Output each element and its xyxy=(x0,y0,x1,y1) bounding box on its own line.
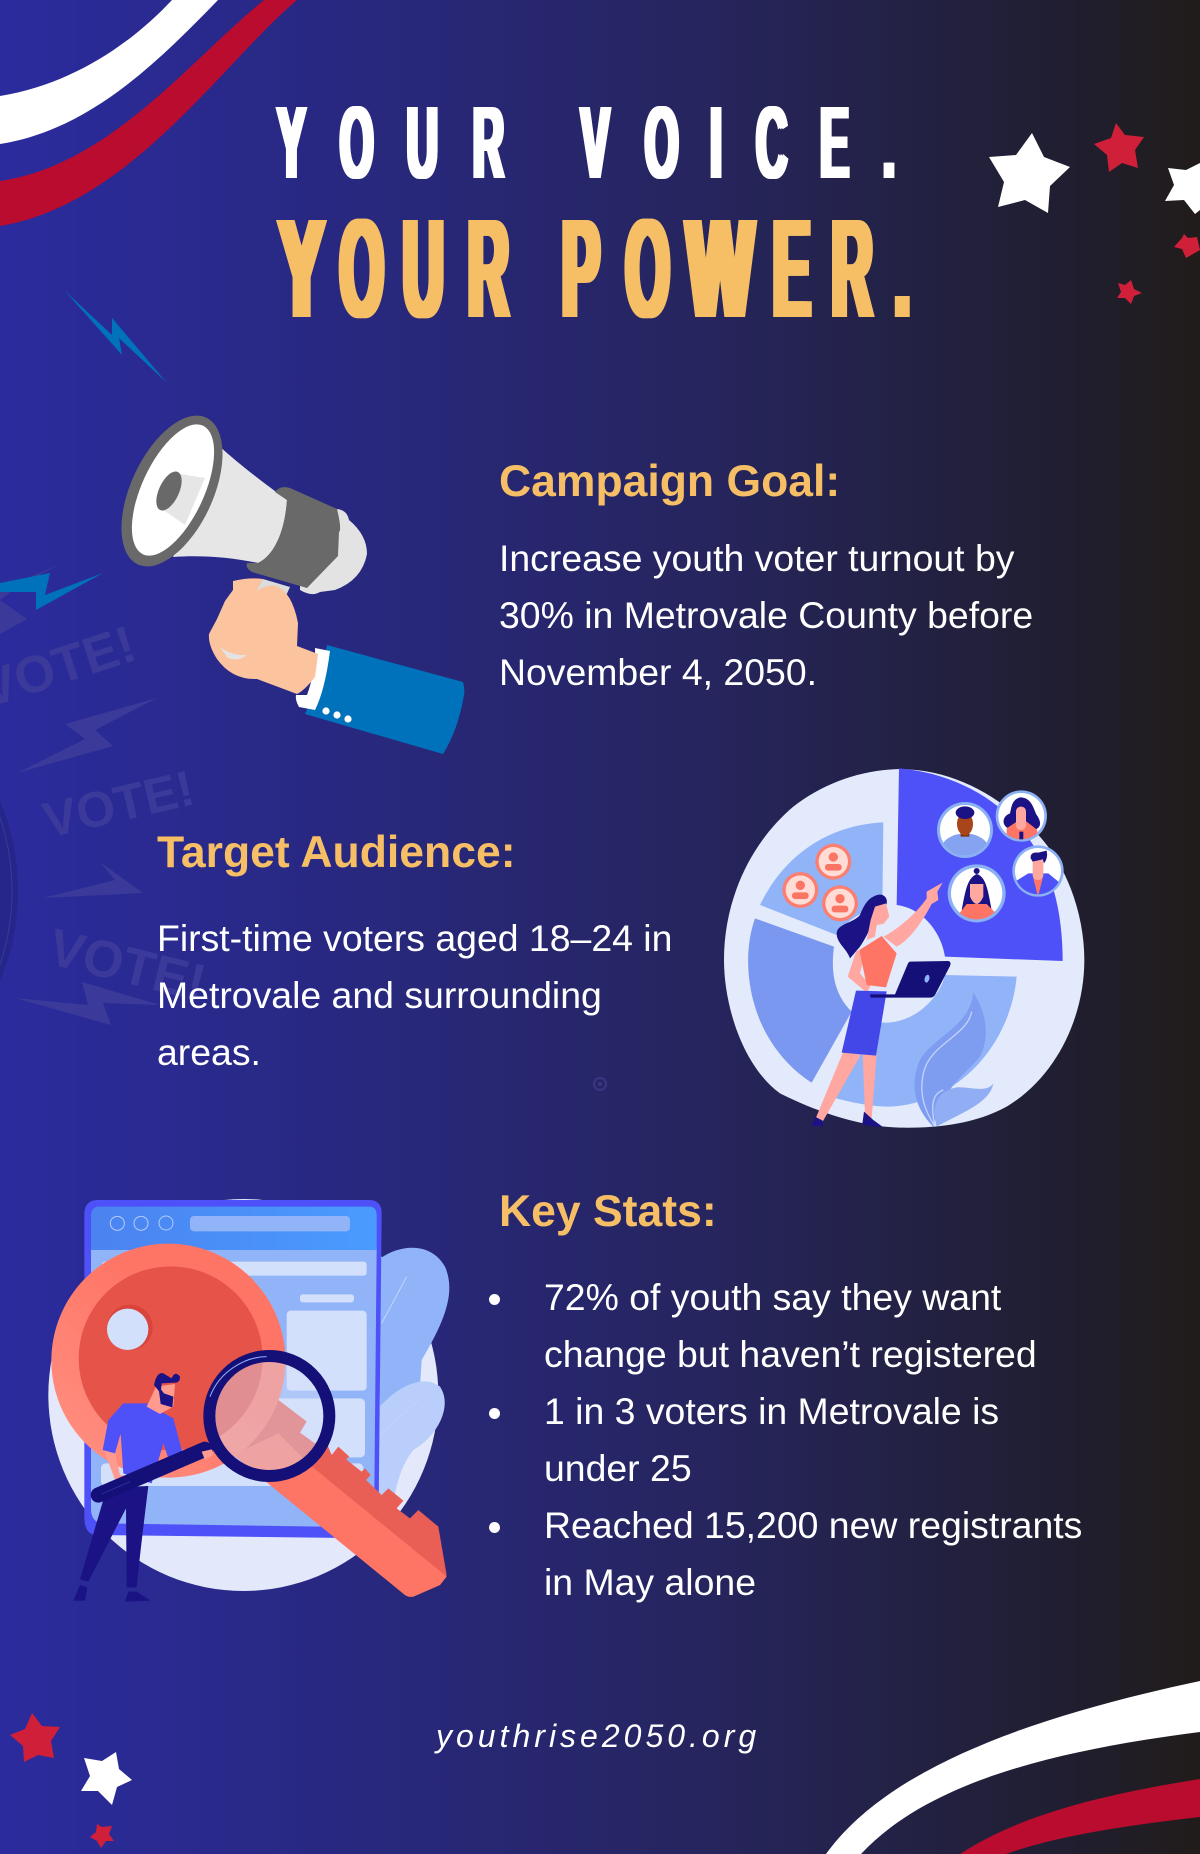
list: key stats: 1 in 3 voters in Metrovale is xyxy=(544,1390,999,1432)
pie wedge: left xyxy=(748,918,852,1083)
heading: key stats: Key Stats: xyxy=(499,1187,717,1236)
text: campaign goal: 30% in Metrovale County before xyxy=(499,594,1033,636)
ribbon: bottom right xyxy=(826,1681,1200,1854)
band xyxy=(247,487,340,588)
pie wedge: blue xyxy=(897,768,1063,961)
footer url: youthrise2050.org xyxy=(436,1718,760,1754)
avatars xyxy=(937,790,1064,923)
man xyxy=(73,1373,183,1602)
cuff xyxy=(296,648,330,710)
title line 2: OUR PO ER. xyxy=(339,189,910,347)
title line 2: W xyxy=(686,189,753,347)
blob xyxy=(48,1199,438,1591)
list: key stats: 72% of youth say they want xyxy=(544,1276,1001,1318)
fist xyxy=(209,578,318,694)
illustration: audience pie chart xyxy=(724,768,1084,1128)
heading: campaign goal: Campaign Goal: xyxy=(499,457,840,506)
text: target audience: Metrovale and surrounding xyxy=(157,974,602,1016)
rear cap xyxy=(300,509,367,594)
text: target audience: areas. xyxy=(157,1031,261,1073)
key xyxy=(51,1244,447,1597)
pie wedge: bottom xyxy=(830,975,1017,1107)
text: campaign goal: Increase youth voter turnout by xyxy=(499,537,1014,579)
icon: megaphone with hand xyxy=(101,400,464,754)
title line 1: YOUR VOICE. xyxy=(277,85,895,200)
illustration: key and magnifier xyxy=(48,1199,449,1602)
faint vote pattern: VOTE! xyxy=(38,760,199,849)
handle xyxy=(255,579,290,600)
woman presenting xyxy=(812,883,951,1127)
text: campaign goal xyxy=(499,537,1033,693)
list: key stats: under 25 xyxy=(544,1447,692,1489)
text: target audience: First-time voters aged 18–24 in xyxy=(157,917,672,959)
leaves xyxy=(915,993,993,1127)
text: target audience xyxy=(157,917,672,1073)
title line 2: Y xyxy=(278,189,324,347)
faint vote pattern: VOTE! xyxy=(43,918,211,1013)
ribbon: top left xyxy=(0,0,297,226)
leaves xyxy=(377,1248,449,1500)
pie wedge: upper left xyxy=(760,822,883,935)
heading: target audience: Target Audience: xyxy=(157,828,516,877)
browser window xyxy=(84,1200,382,1538)
magnifier xyxy=(98,1356,329,1495)
sleeve xyxy=(305,645,464,754)
text: campaign goal: November 4, 2050. xyxy=(499,651,817,693)
bell rim xyxy=(101,400,243,582)
coral user icons xyxy=(782,844,858,921)
cone xyxy=(173,445,287,563)
list: key stats: in May alone xyxy=(544,1561,756,1603)
list: key stats: change but haven’t registered xyxy=(544,1333,1037,1375)
blob xyxy=(724,769,1084,1128)
list: key stats: Reached 15,200 new registrants xyxy=(544,1504,1082,1546)
stars: top right xyxy=(989,123,1200,304)
icon: blue lightning top xyxy=(65,291,167,383)
list: key stats xyxy=(489,1276,1082,1603)
faint vote pattern xyxy=(0,564,606,1090)
stars: bottom left xyxy=(10,1713,132,1848)
